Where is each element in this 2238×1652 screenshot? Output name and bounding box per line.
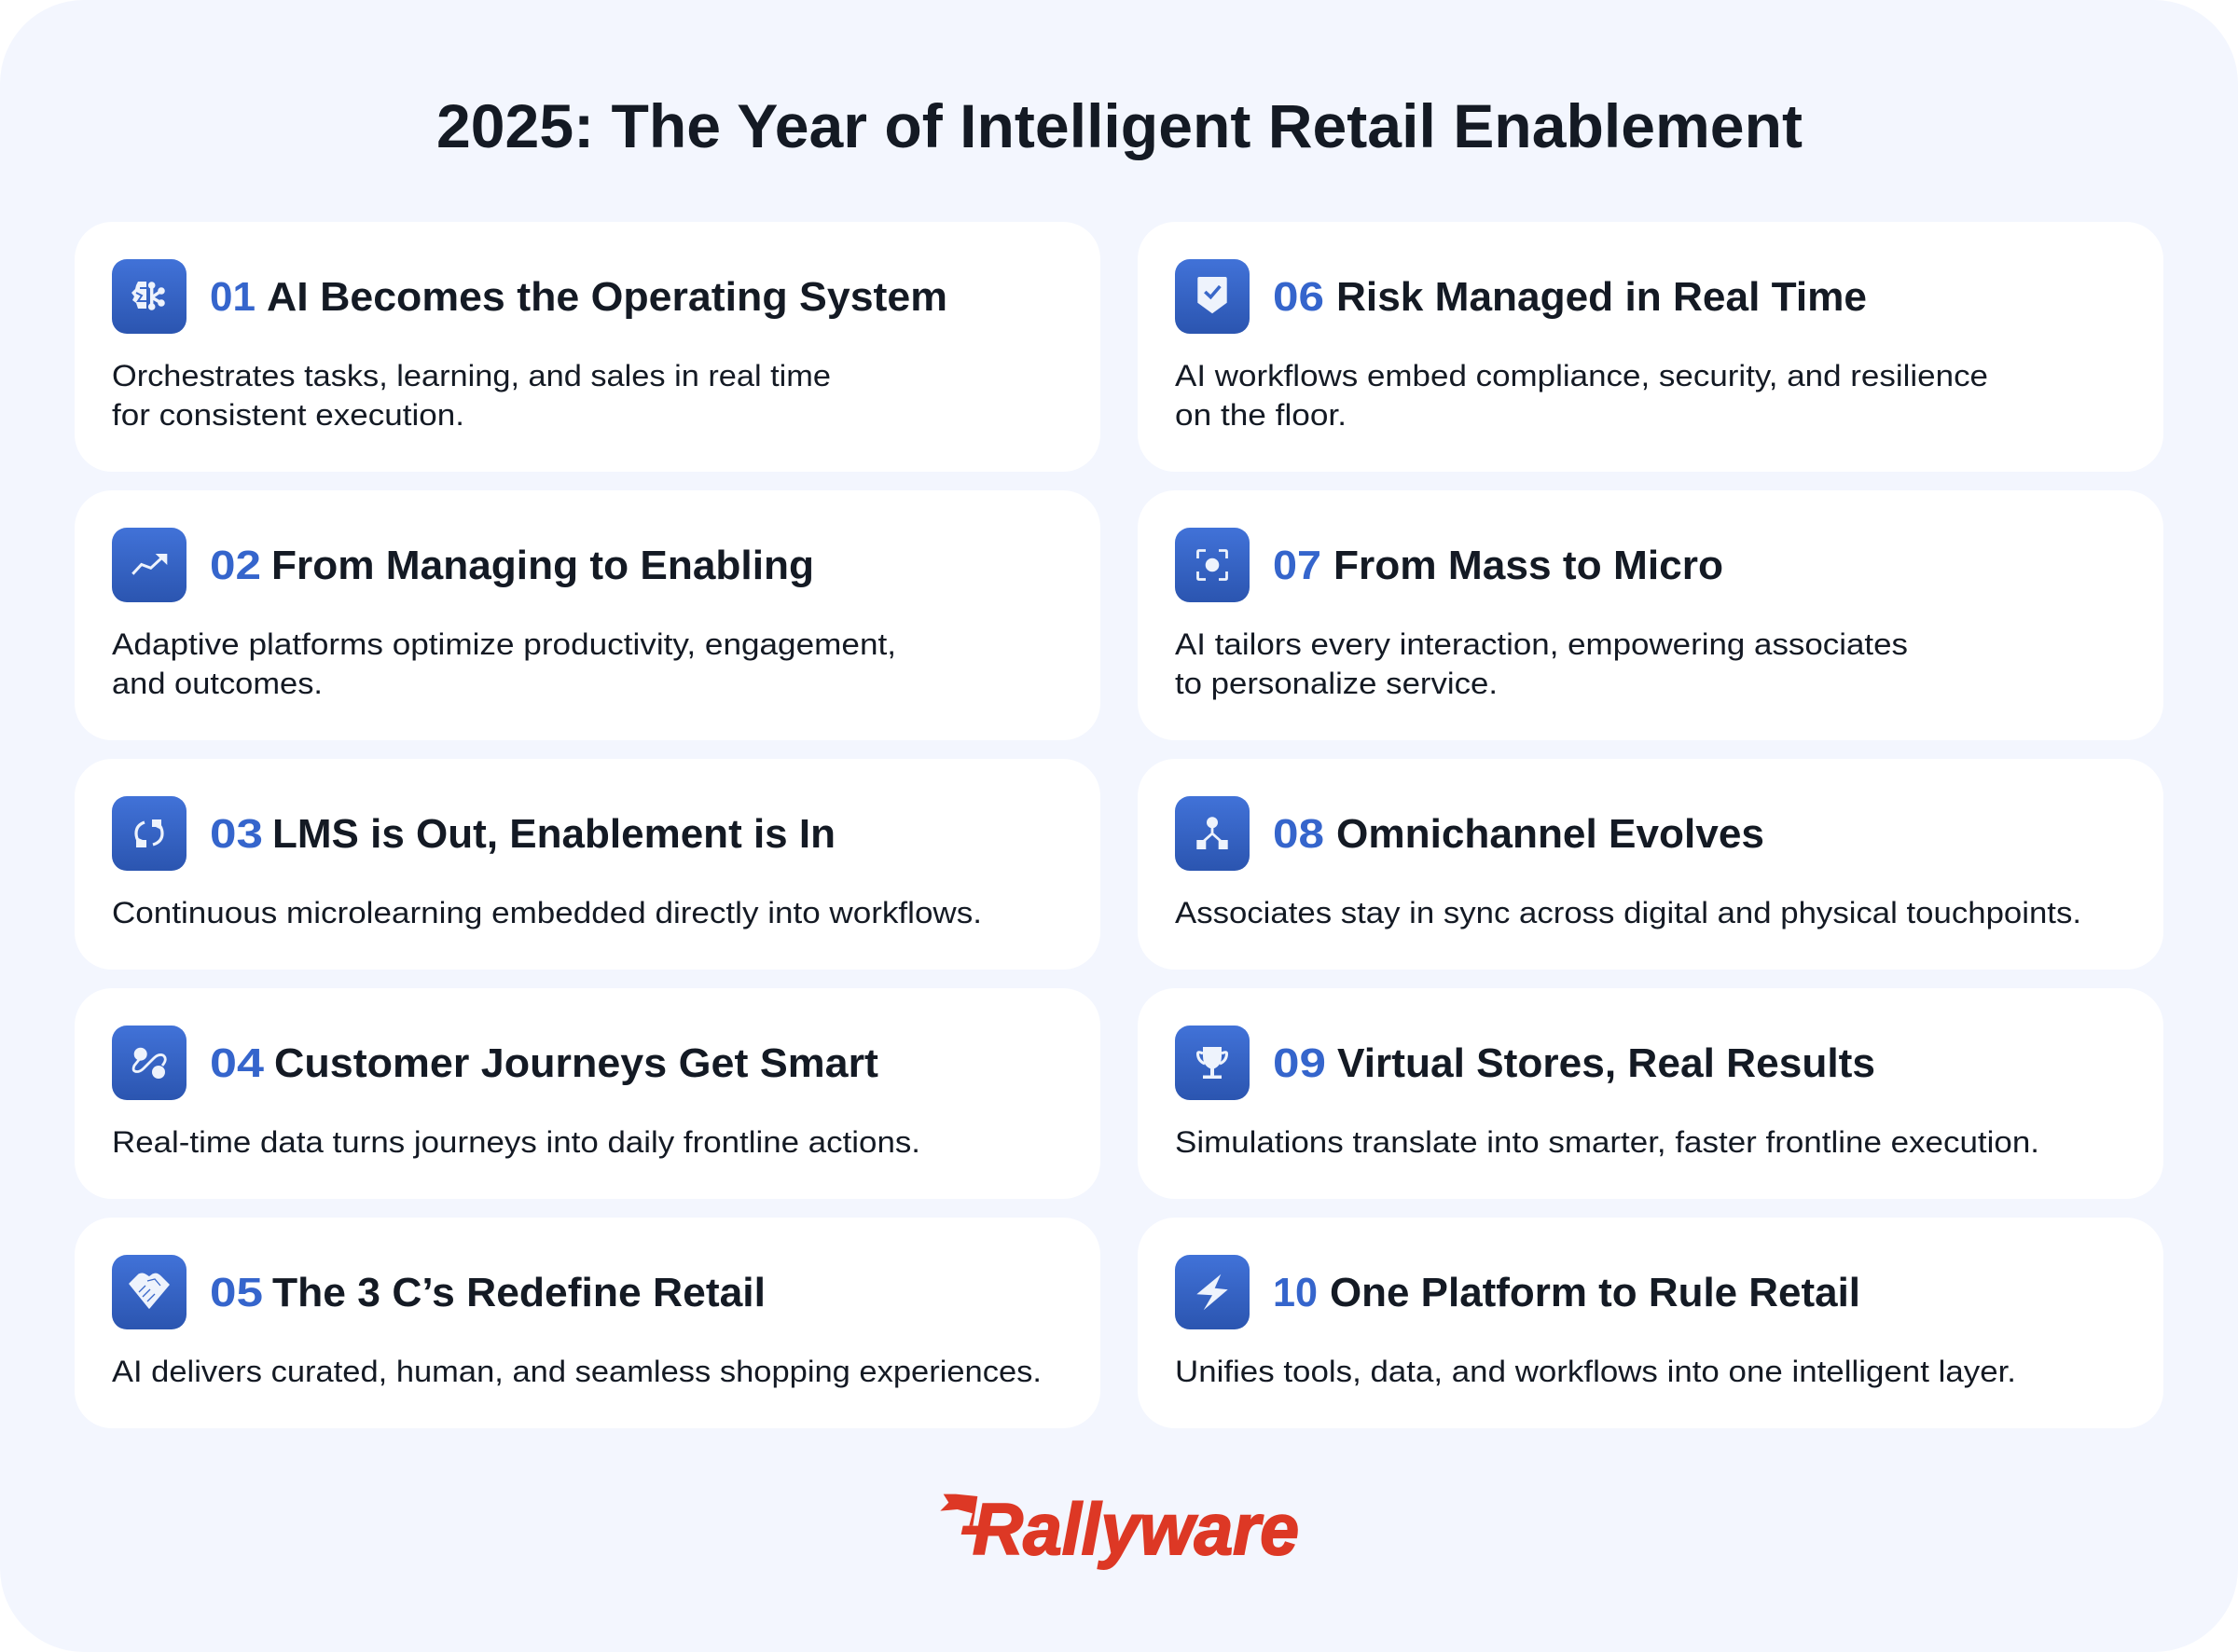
description: 05: AI delivers curated, human, and seamless shopping experiences. — [112, 1355, 1042, 1388]
panel: 01 AI Becomes the Operating System — [75, 222, 1100, 472]
heading: 10: 10 — [1273, 1270, 1318, 1315]
heading: 02: From Managing to Enabling — [271, 543, 814, 588]
description: 01 — [112, 359, 831, 432]
panel: 06 Risk Managed in Real Time — [1138, 222, 2163, 472]
description: 04: Real-time data turns journeys into daily frontline actions. — [112, 1125, 920, 1159]
heading: 05: 05 — [210, 1270, 263, 1315]
description: 02 — [112, 627, 896, 700]
heading: 01: 01 — [210, 274, 256, 320]
panel: 08 Omnichannel Evolves — [1138, 759, 2163, 970]
description: 07: to personalize service. — [1175, 667, 1498, 700]
description: 02: and outcomes. — [112, 667, 323, 700]
description: 06 — [1175, 359, 1988, 432]
icon: sync arrows — [112, 796, 186, 871]
heading: 02: 02 — [210, 543, 261, 588]
icon: shield check — [1175, 259, 1250, 334]
heading: 07: 07 — [1273, 543, 1321, 588]
heading: 09: Virtual Stores, Real Results — [1337, 1040, 1875, 1086]
description: 06: on the floor. — [1175, 398, 1347, 432]
heading: 06: 06 — [1273, 274, 1324, 320]
heading: 05: The 3 C’s Redefine Retail — [272, 1270, 766, 1315]
panel: 03 LMS is Out, Enablement is In — [75, 759, 1100, 970]
description: 07: AI tailors every interaction, empowering associates — [1175, 627, 1908, 661]
panel: 10 One Platform to Rule Retail — [1138, 1218, 2163, 1428]
panel: 02 From Managing to Enabling — [75, 490, 1100, 740]
panel: 07 From Mass to Micro — [1138, 490, 2163, 740]
description: 10: Unifies tools, data, and workflows into one intelligent layer. — [1175, 1355, 2016, 1388]
heading: 06: Risk Managed in Real Time — [1336, 274, 1867, 320]
panel: 05 The 3 C's Redefine Retail — [75, 1218, 1100, 1428]
description: 01: Orchestrates tasks, learning, and sales in real time — [112, 359, 831, 392]
heading: 08: 08 — [1273, 811, 1324, 857]
icon: brain — [112, 259, 186, 334]
icon: handshake heart — [112, 1255, 186, 1329]
panel: 04 Customer Journeys Get Smart — [75, 988, 1100, 1199]
heading: 03: LMS is Out, Enablement is In — [272, 811, 836, 857]
icon: trend arrow — [112, 528, 186, 602]
heading: 07: From Mass to Micro — [1333, 543, 1723, 588]
icon: trophy — [1175, 1026, 1250, 1100]
description: 03: Continuous microlearning embedded directly into workflows. — [112, 896, 982, 929]
logo flag mark — [940, 1494, 987, 1535]
heading: 09: 09 — [1273, 1040, 1326, 1086]
logo wordmark: Rallyware — [973, 1488, 1299, 1570]
panel: 09 Virtual Stores, Real Results — [1138, 988, 2163, 1199]
description: 09: Simulations translate into smarter, faster frontline execution. — [1175, 1125, 2039, 1159]
logo: Rallyware — [940, 1488, 1299, 1570]
heading: 01: AI Becomes the Operating System — [267, 274, 947, 320]
heading: 10: One Platform to Rule Retail — [1330, 1270, 1860, 1315]
icon: network nodes — [1175, 796, 1250, 871]
icon: lightning bolt — [1175, 1255, 1250, 1329]
heading: 08: Omnichannel Evolves — [1336, 811, 1764, 857]
description: 02: Adaptive platforms optimize productivity, engagement, — [112, 627, 896, 661]
description: 01: for consistent execution. — [112, 398, 464, 432]
heading: 03: 03 — [210, 811, 263, 857]
icon: focus target — [1175, 528, 1250, 602]
description: 07 — [1175, 627, 1908, 700]
icon: journey path — [112, 1026, 186, 1100]
title: 2025: The Year of Intelligent Retail Enablement — [436, 91, 1803, 160]
heading: 04: Customer Journeys Get Smart — [274, 1040, 878, 1086]
heading: 04: 04 — [210, 1040, 265, 1086]
description: 06: AI workflows embed compliance, security, and resilience — [1175, 359, 1988, 392]
description: 08: Associates stay in sync across digital and physical touchpoints. — [1175, 896, 2081, 929]
